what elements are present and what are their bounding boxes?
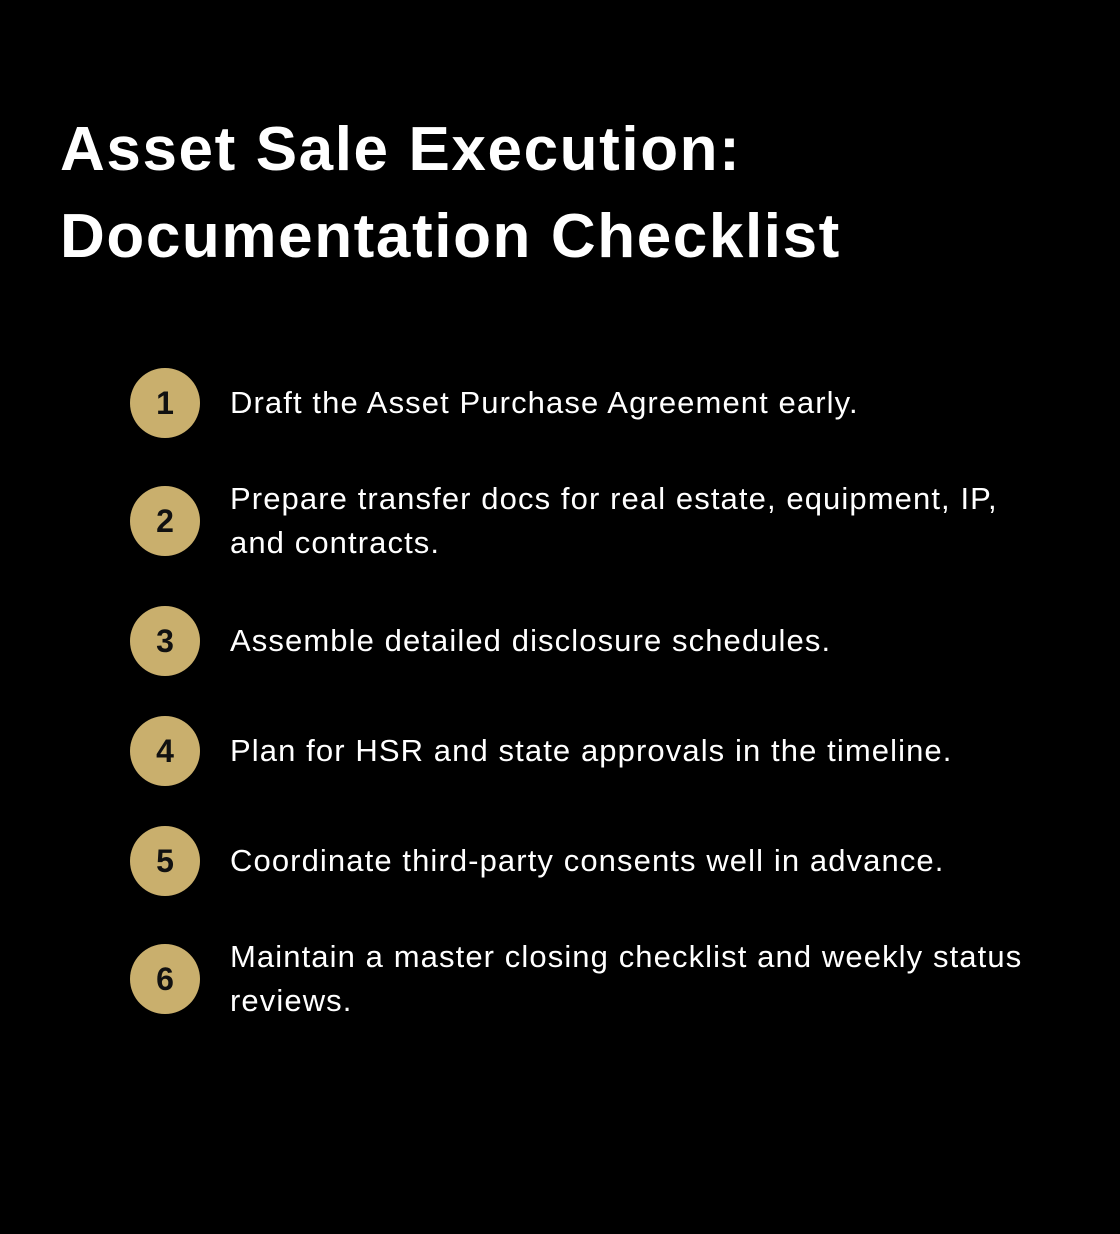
item 5 (130, 826, 944, 896)
item 6: Maintain a master closing checklist and weekly status (230, 939, 1022, 974)
item 4 (130, 716, 952, 786)
item 3: 3 (156, 623, 174, 659)
item 4: 4 (156, 733, 174, 769)
item 1 (130, 368, 859, 438)
item 5: Coordinate third-party consents well in advance. (230, 843, 944, 878)
title: Asset Sale Execution: (60, 115, 741, 184)
item 4: Plan for HSR and state approvals in the timeline. (230, 733, 952, 768)
item 1: Draft the Asset Purchase Agreement early. (230, 385, 859, 420)
item 2 (130, 481, 998, 560)
item 2: Prepare transfer docs for real estate, equipment, IP, (230, 481, 998, 516)
title (60, 115, 841, 271)
item 6: 6 (156, 961, 174, 997)
item 3 (130, 606, 831, 676)
item 3: Assemble detailed disclosure schedules. (230, 623, 831, 658)
item 2: and contracts. (230, 525, 440, 560)
item 6: reviews. (230, 983, 352, 1018)
item 5: 5 (156, 843, 174, 879)
item 2: 2 (156, 503, 174, 539)
item 1: 1 (156, 385, 174, 421)
title: Documentation Checklist (60, 202, 841, 271)
item 6 (130, 939, 1022, 1018)
